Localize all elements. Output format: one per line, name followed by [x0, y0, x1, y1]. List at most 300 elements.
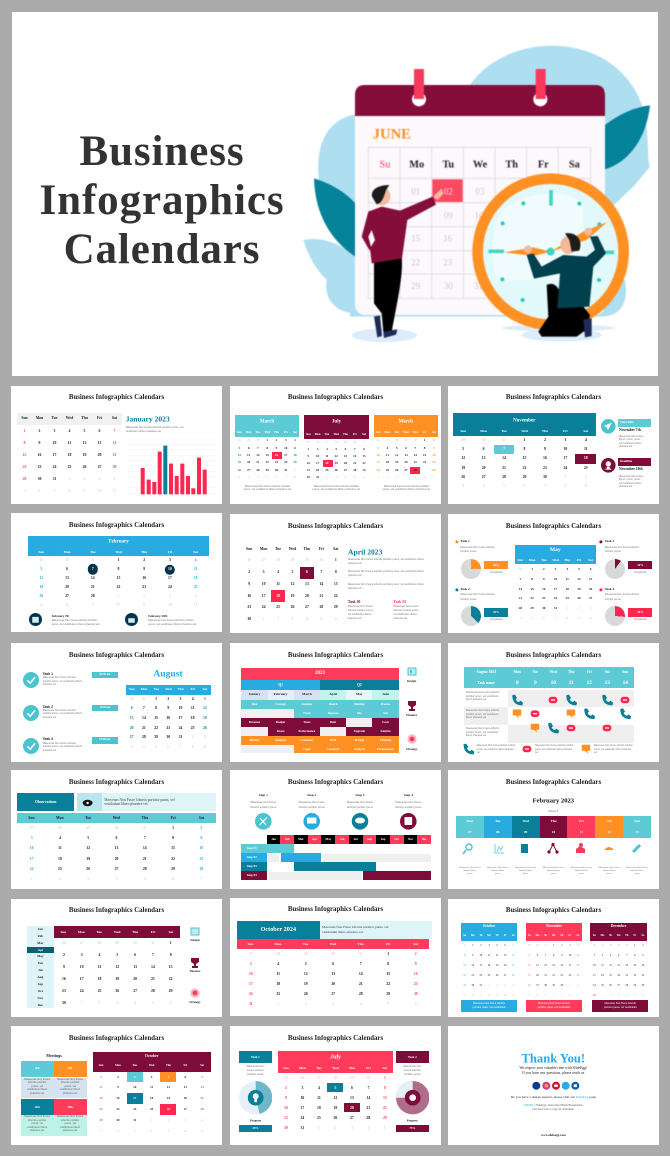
weekday labels: Thu [413, 431, 418, 434]
weekday header: Wed [66, 416, 73, 420]
July calendar: 5 [335, 447, 337, 451]
March calendar orange: 20 [404, 460, 408, 464]
March calendar orange: 15 [423, 453, 426, 457]
task 1 percent [239, 1125, 272, 1132]
calendar grid: 21 [359, 982, 363, 986]
calendar grid: 3 [301, 1086, 303, 1090]
March calendar: 21 [256, 460, 259, 464]
captions: purus, vel vestibulum libero pharetra vel. [312, 488, 361, 491]
March calendar orange: 7 [433, 475, 435, 479]
calendar grid: 5 [24, 489, 25, 493]
calendar grid: 29 [115, 941, 119, 945]
notes: pharetra vel. [348, 574, 362, 577]
deadline description: pharetra vel. [619, 485, 633, 488]
time pill: 09:00 am [99, 673, 110, 676]
March calendar: 6 [276, 475, 277, 479]
weekday labels: Wed [521, 429, 528, 433]
December grid: 6 [618, 954, 619, 957]
October header [461, 923, 517, 941]
gantt row 3 bar [294, 862, 376, 871]
icon: finance [190, 958, 200, 968]
month and task name labels: August 2023 [476, 670, 496, 674]
description box: Maecenas Non Fusce lobortis porttitor purus, vel [322, 925, 388, 929]
July calendar: 11 [325, 454, 328, 458]
calendar grid: 15 [154, 716, 158, 720]
legend text: Maecenas Non Fusce lobortis porttitor [594, 745, 633, 747]
calendar grid: 26 [86, 867, 90, 871]
row texts: Maecenas Non Fusce lobortis [466, 709, 499, 712]
months row: Mar [298, 837, 304, 841]
March calendar orange: 12 [395, 453, 398, 457]
weekday labels: Th [505, 159, 518, 170]
year bar: 2023 [315, 671, 325, 676]
December caption box [592, 1000, 648, 1012]
calendar grid: 20 [331, 982, 335, 986]
captions [382, 485, 431, 491]
meeting cell [21, 1061, 54, 1077]
task text: porttitor purus, vel vestibulum libero [43, 712, 82, 715]
captions row: Maecenas Non Fusce [626, 867, 648, 869]
weekday labels: Fri [168, 550, 172, 554]
weekday labels: Mon [480, 429, 487, 433]
calendar grid: 3 [116, 1001, 118, 1005]
weekdays and dates: Mon [514, 670, 521, 674]
calendar grid: 19 [115, 977, 119, 981]
November grid: 26 [528, 984, 531, 987]
calendar grid: 12 [461, 456, 465, 460]
weekday labels: Thu [274, 431, 279, 434]
weekday labels: Mon [115, 1064, 121, 1067]
task 02: pharetra vel. [393, 617, 408, 620]
meeting note: Maecenas Non Fusce [24, 1115, 50, 1118]
weekday header: Sat [112, 416, 117, 420]
month row: June [382, 692, 389, 696]
calendar grid: 9 [578, 616, 580, 620]
calendar grid: 31 [249, 1002, 253, 1006]
task 2 label [396, 1051, 429, 1063]
calendar grid [247, 558, 338, 621]
meeting cell: 11th [34, 1105, 40, 1109]
weekdays and dates: 10 [551, 680, 556, 686]
October grid: 12 [496, 954, 498, 957]
month header [93, 1052, 211, 1072]
July calendar: 7 [354, 447, 356, 451]
description box: vestibulum libero pharetra vel. [322, 930, 364, 934]
row 2 left background [464, 707, 508, 725]
gantt row 4 label: Step 04 [247, 873, 257, 877]
calendar grid: 24 [168, 585, 172, 589]
calendar grid: 18 [584, 456, 588, 460]
months row: Apr [312, 837, 317, 841]
ground shadows [352, 325, 615, 342]
task 3 [599, 539, 652, 579]
calendar grid: 11 [113, 489, 116, 493]
weekday labels: Sa [577, 934, 579, 937]
calendar grid: 11 [191, 706, 194, 710]
calendar grid: 11 [317, 1096, 321, 1100]
slide: October November December [448, 899, 659, 1017]
calendar grid: 1 [318, 1126, 320, 1130]
meeting cell [21, 1099, 54, 1115]
calendar grid: 8 [384, 1086, 386, 1090]
calendar grid: 30 [367, 1076, 370, 1080]
calendar grid: 17 [249, 982, 253, 986]
calendar grid: 13 [184, 1085, 187, 1089]
calendar grid: 8 [566, 616, 568, 620]
calendar grid: 4 [99, 953, 100, 957]
meeting note: vestibulum libero [60, 1088, 80, 1091]
March calendar: 23 [275, 460, 278, 464]
weekday labels: Mon [385, 431, 390, 434]
November caption box: porttitor purus, vel vestibulum [537, 1006, 570, 1009]
December grid: 27 [617, 984, 620, 987]
bar chart [128, 444, 217, 494]
calendar grid: 2 [59, 877, 61, 881]
weekday labels: Fri [423, 431, 426, 434]
March calendar orange: 3 [396, 475, 398, 479]
calendar grid: 20 [133, 977, 137, 981]
July calendar: 10 [316, 454, 319, 458]
weekday labels: Tue [90, 550, 95, 554]
calendar grid: 7 [143, 706, 145, 710]
week columns: 13 [635, 830, 639, 834]
weekday labels: Tu [442, 159, 454, 170]
calendar grid: 27 [317, 1076, 321, 1080]
December grid: 29 [633, 984, 636, 987]
slide title: Business Infographics Calendars [506, 652, 601, 659]
captions: purus, vel vestibulum libero pharetra vel. [382, 488, 431, 491]
weekday labels: Thu [304, 547, 310, 551]
calendar grid: 14 [142, 716, 146, 720]
week columns: Thu [550, 819, 557, 823]
weekday header: Tue [52, 416, 57, 420]
October grid: 28 [512, 974, 515, 977]
calendar grid: 6 [483, 447, 485, 451]
December grid: 16 [642, 964, 644, 967]
task 1 text: Fusce lobortis [247, 1069, 264, 1072]
March calendar orange: 26 [395, 468, 398, 472]
calendar grid: 26 [291, 605, 294, 609]
weekday labels: Mo [471, 934, 475, 937]
task marker [599, 588, 603, 591]
calendar grid: 24 [53, 465, 56, 469]
July calendar: 26 [316, 440, 319, 444]
task 1 label [239, 1051, 272, 1063]
start date text: November 7th [619, 428, 641, 432]
calendar grid: 22 [386, 982, 390, 986]
man moving clock hands [524, 228, 606, 337]
gantt row 2 gray [268, 854, 279, 862]
calendar grid: 4 [277, 962, 279, 966]
calendar grid: 3 [351, 1126, 353, 1130]
task 2 label: Task 2 [408, 1055, 417, 1059]
calendar grid: 2 [143, 594, 145, 598]
event note: purus, vel vestibulum libero pharetra vel. [52, 623, 100, 626]
calendar grid: 3 [169, 594, 171, 598]
calendar grid: 16 [543, 456, 547, 460]
legend text [477, 745, 516, 755]
calendar grid: 30 [482, 438, 486, 442]
weekday labels: We [617, 934, 620, 937]
October grid: 7 [513, 944, 514, 947]
start description [619, 435, 644, 448]
weekday labels: Tue [133, 1064, 137, 1067]
March calendar orange: 16 [432, 453, 435, 457]
weekday labels: Fri [563, 429, 568, 433]
July calendar: 23 [307, 468, 310, 472]
December grid: 30 [642, 984, 644, 987]
calendar grid: 9 [143, 603, 145, 607]
slide title: Business Infographics Calendars [69, 652, 164, 659]
weekdays and dates: Fri [587, 670, 592, 674]
task 2 percent [396, 1125, 429, 1132]
March calendar orange: 27 [386, 438, 389, 442]
schedule header [464, 667, 634, 688]
months row: May [325, 837, 331, 841]
months sidebar: Feb [38, 934, 43, 938]
weekdays and dates: 9 [534, 680, 537, 686]
December grid: 4 [626, 994, 627, 997]
March calendar: 5 [239, 446, 240, 450]
task 2 percent: 75% [409, 1126, 415, 1130]
start description: vel vestibulum libero [619, 442, 642, 445]
slide: meetings [11, 1026, 222, 1145]
March calendar: 24 [284, 460, 287, 464]
slide: February 2023 week [448, 770, 659, 889]
start description: Maecenas Non Fusce [619, 435, 643, 438]
weekday labels: Wed [403, 431, 409, 434]
March calendar orange: 30 [414, 438, 417, 442]
highlighted date cell [432, 179, 463, 202]
weekday labels: Wed [289, 547, 296, 551]
calendar grid: 12 [86, 846, 90, 850]
gantt row 2 bar [281, 853, 321, 862]
October grid: 5 [464, 994, 465, 997]
calendar grid: 29 [350, 1076, 354, 1080]
July calendar: 28 [353, 468, 356, 472]
November grid: 30 [536, 944, 539, 947]
July calendar: 28 [335, 440, 338, 444]
November grid: 27 [536, 984, 539, 987]
calendar grid: 15 [171, 846, 175, 850]
weekday labels: Wed [115, 550, 122, 554]
calendar grid: 2 [167, 697, 169, 701]
March calendar orange: 29 [404, 438, 408, 442]
March calendar: 26 [238, 438, 241, 442]
task 01: vel vestibulum libero [348, 613, 371, 616]
calendar grid: 10 [262, 582, 266, 586]
October grid: 27 [504, 974, 506, 977]
row texts: Maecenas Non Fusce lobortis [466, 691, 499, 694]
calendar grid: 25 [566, 596, 569, 600]
icon: check [23, 705, 39, 721]
captions: Maecenas Non Fusce lobortis porttitor [314, 485, 359, 488]
December grid [590, 941, 647, 1001]
December grid: 19 [609, 974, 612, 977]
description box [320, 921, 432, 939]
calendar grid: 21 [201, 1096, 204, 1100]
calendar grid: 7 [367, 1086, 369, 1090]
calendar grid: 8 [155, 706, 157, 710]
design rows: Concept [275, 702, 286, 706]
description [126, 426, 184, 433]
months sidebar: Sep [38, 982, 43, 986]
calendar grid: 31 [143, 826, 147, 830]
calendar grid: 26 [301, 1076, 304, 1080]
weekday labels: Sa [512, 934, 515, 937]
calendar grid: 3 [87, 877, 89, 881]
strategy rows: Customer [301, 738, 313, 742]
notes [348, 583, 424, 590]
October grid: 3 [480, 944, 482, 947]
completed label: Completed [634, 570, 646, 573]
week columns: Sun [634, 819, 640, 823]
December header [590, 923, 647, 941]
highlight [344, 1103, 360, 1112]
July panel header: July [332, 419, 341, 424]
weekday labels: Sun [237, 431, 242, 434]
weekday labels: Th [560, 934, 563, 937]
March calendar: 22 [266, 460, 269, 464]
weekday labels [518, 558, 593, 562]
task row 1 [23, 671, 118, 689]
calendar grid: 12 [291, 582, 294, 586]
week columns: 11 [580, 830, 583, 834]
task text: porttitor purus. [460, 550, 477, 553]
weekday header: Mon [275, 942, 281, 946]
calendar grid: 31 [359, 952, 363, 956]
November grid: 29 [528, 944, 531, 947]
month row: February [274, 692, 288, 696]
November grid: 22 [552, 974, 555, 977]
meeting note: vestibulum libero [27, 1126, 47, 1128]
completed label: Completed [490, 570, 502, 573]
month header: May [550, 547, 561, 553]
task text: Task 1 [43, 672, 53, 676]
November caption box [526, 1000, 582, 1012]
month heading: April 2023 [348, 547, 382, 556]
gantt row 1: Step 01 [247, 846, 257, 850]
deadline description [619, 475, 644, 488]
calendar grid: 10 [301, 1096, 304, 1100]
icon: strategy [407, 734, 417, 744]
step text: Maecenas Non Fusce [395, 801, 421, 804]
completed label: Completed [490, 618, 502, 621]
weekday labels: Fri [183, 1064, 187, 1067]
design rows [241, 700, 399, 718]
calendar grid: 11 [194, 567, 197, 571]
March calendar orange: 3 [377, 446, 379, 450]
slide title: Business Infographics Calendars [506, 907, 601, 914]
calendar grid: 23 [142, 585, 146, 589]
calendar grid: 3 [54, 429, 55, 433]
July calendar: 3 [317, 447, 318, 451]
calendar grid: 17 [30, 857, 34, 861]
weekday labels [237, 431, 297, 434]
event note: purus, vel vestibulum libero pharetra vel. [148, 623, 197, 626]
November grid: 30 [560, 984, 563, 987]
icon: gift badge [125, 613, 138, 626]
months row: Sep [381, 837, 385, 841]
calendar grid: 12 [577, 577, 581, 581]
calendar grid: 13 [482, 456, 486, 460]
calendar grid: 10 [563, 447, 567, 451]
March calendar orange: 22 [423, 460, 426, 464]
July calendar: 22 [362, 461, 366, 465]
March calendar orange: 5 [414, 475, 416, 479]
calendar grid: 22 [169, 977, 173, 981]
calendar grid: 4 [195, 594, 197, 598]
calendar grid: 6 [116, 836, 117, 840]
calendar grid: 9 [248, 582, 250, 586]
calendar grid: 6 [335, 617, 337, 621]
calendar grid: 21 [91, 585, 95, 589]
gantt row 3 label: Step 03 [247, 864, 257, 868]
calendar grid: 5 [387, 1002, 389, 1006]
calendar grid: 8 [172, 836, 174, 840]
weekday labels: Wed [552, 558, 559, 562]
description text [104, 798, 175, 806]
weekday labels: Mon [299, 1066, 306, 1070]
calendar grid: 5 [384, 1126, 386, 1130]
calendar grid: 28 [367, 1116, 370, 1120]
strategy rows: Legal [303, 746, 310, 750]
calendar grid: 3 [180, 697, 181, 701]
weekday labels: Tu [609, 934, 612, 937]
March calendar: 1 [294, 468, 296, 472]
weekday labels: Thu [166, 1064, 171, 1067]
July calendar: 29 [344, 440, 347, 444]
March calendar [238, 438, 297, 479]
task text: Maecenas Non Fusce lobortis [43, 742, 76, 745]
date marker [87, 564, 98, 574]
website: www.slideegg.com [541, 1134, 566, 1138]
March calendar: 26 [238, 468, 241, 472]
weekday labels: Mo [409, 159, 424, 170]
December grid: 20 [617, 974, 620, 977]
calendar grid: 10 [98, 489, 101, 493]
calendar grid: 29 [530, 606, 534, 610]
task text: pharetra vel. [43, 683, 57, 686]
weekday labels: Thu [564, 558, 570, 562]
calendar grid: 5 [531, 616, 533, 620]
calendar grid: 2 [544, 438, 546, 442]
calendar grid: 28 [201, 1107, 204, 1111]
calendar grid: 14 [143, 846, 147, 850]
July calendar: 1 [363, 440, 365, 444]
July calendar: 27 [344, 468, 347, 472]
captions row: purus [579, 873, 584, 875]
calendar grid: 12 [39, 576, 43, 580]
meeting note: purus, vel [64, 1122, 76, 1125]
week columns: Fri [579, 819, 584, 823]
December grid: 31 [593, 994, 596, 997]
calendar grid: 21 [143, 857, 147, 861]
weekday labels: Fri [366, 1066, 371, 1070]
task 01: Task 01 [348, 599, 361, 604]
month row [241, 690, 399, 700]
March calendar orange: 23 [432, 460, 435, 464]
October grid: 10 [479, 954, 482, 957]
calendar grid [93, 1072, 211, 1137]
weekday header: Fri [386, 942, 390, 946]
row texts: Maecenas Non Fusce lobortis [466, 727, 499, 730]
finance rows: Budget [276, 720, 285, 724]
meeting note: lobortis porttitor [61, 1118, 79, 1122]
task 1 donut [239, 1081, 272, 1115]
calendar grid: 28 [334, 1076, 337, 1080]
date numbers: 23 [443, 258, 453, 268]
